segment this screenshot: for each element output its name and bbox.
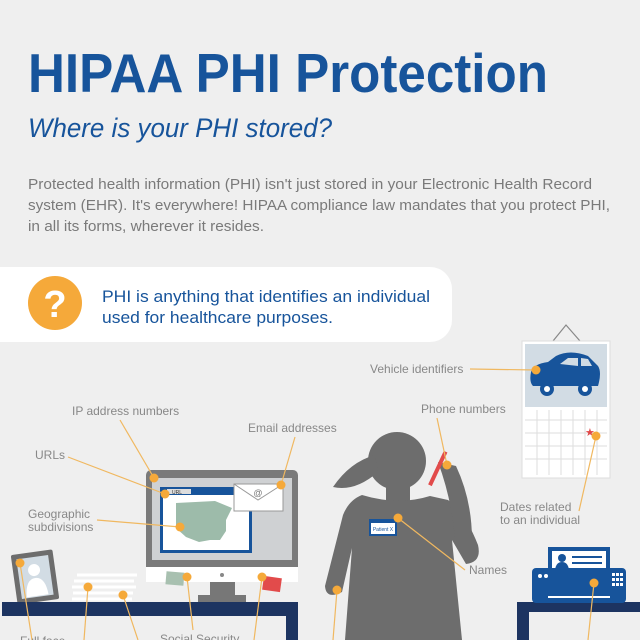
labels: IP address numbers <box>72 404 179 418</box>
woman figure <box>325 432 479 640</box>
calendar with car <box>522 325 610 478</box>
labels: Geographic <box>28 507 90 521</box>
intro paragraph: in all its forms, wherever it resides. <box>28 218 264 235</box>
labels: URLs <box>35 448 65 462</box>
monitor: URL <box>172 490 182 496</box>
labels: Phone numbers <box>421 402 506 416</box>
title: HIPAA PHI Protection <box>28 42 548 104</box>
labels: Names <box>469 563 507 577</box>
callout: PHI definition: used for healthcare purposes. <box>102 308 333 327</box>
papers <box>72 575 137 599</box>
data point dots <box>16 366 600 600</box>
labels: Dates related <box>500 500 571 514</box>
callout: PHI definition: PHI is anything that identifies an individual <box>102 287 430 306</box>
icon: question mark <box>28 276 82 330</box>
callout: PHI definition <box>0 267 452 342</box>
labels: to an individual <box>500 513 580 527</box>
labels: Email addresses <box>248 421 337 435</box>
labels: subdivisions <box>28 520 93 534</box>
woman figure: Patient X <box>373 527 394 533</box>
photo frame <box>11 549 59 605</box>
desks <box>2 602 640 640</box>
monitor <box>146 470 298 602</box>
intro paragraph: Protected health information (PHI) isn't just stored in your Electronic Health Record <box>28 176 592 193</box>
connector lines <box>20 369 596 640</box>
intro paragraph <box>28 176 610 235</box>
labels: Vehicle identifiers <box>370 362 463 376</box>
labels <box>20 362 580 640</box>
fax machine <box>532 547 626 603</box>
subtitle: Where is your PHI stored? <box>28 113 332 143</box>
intro paragraph: system (EHR). It's everywhere! HIPAA compliance law mandates that you protect PHI, <box>28 197 610 214</box>
icon: question mark: ? <box>43 284 67 326</box>
calendar with car: ★ <box>585 427 595 439</box>
monitor: @ <box>253 488 263 498</box>
